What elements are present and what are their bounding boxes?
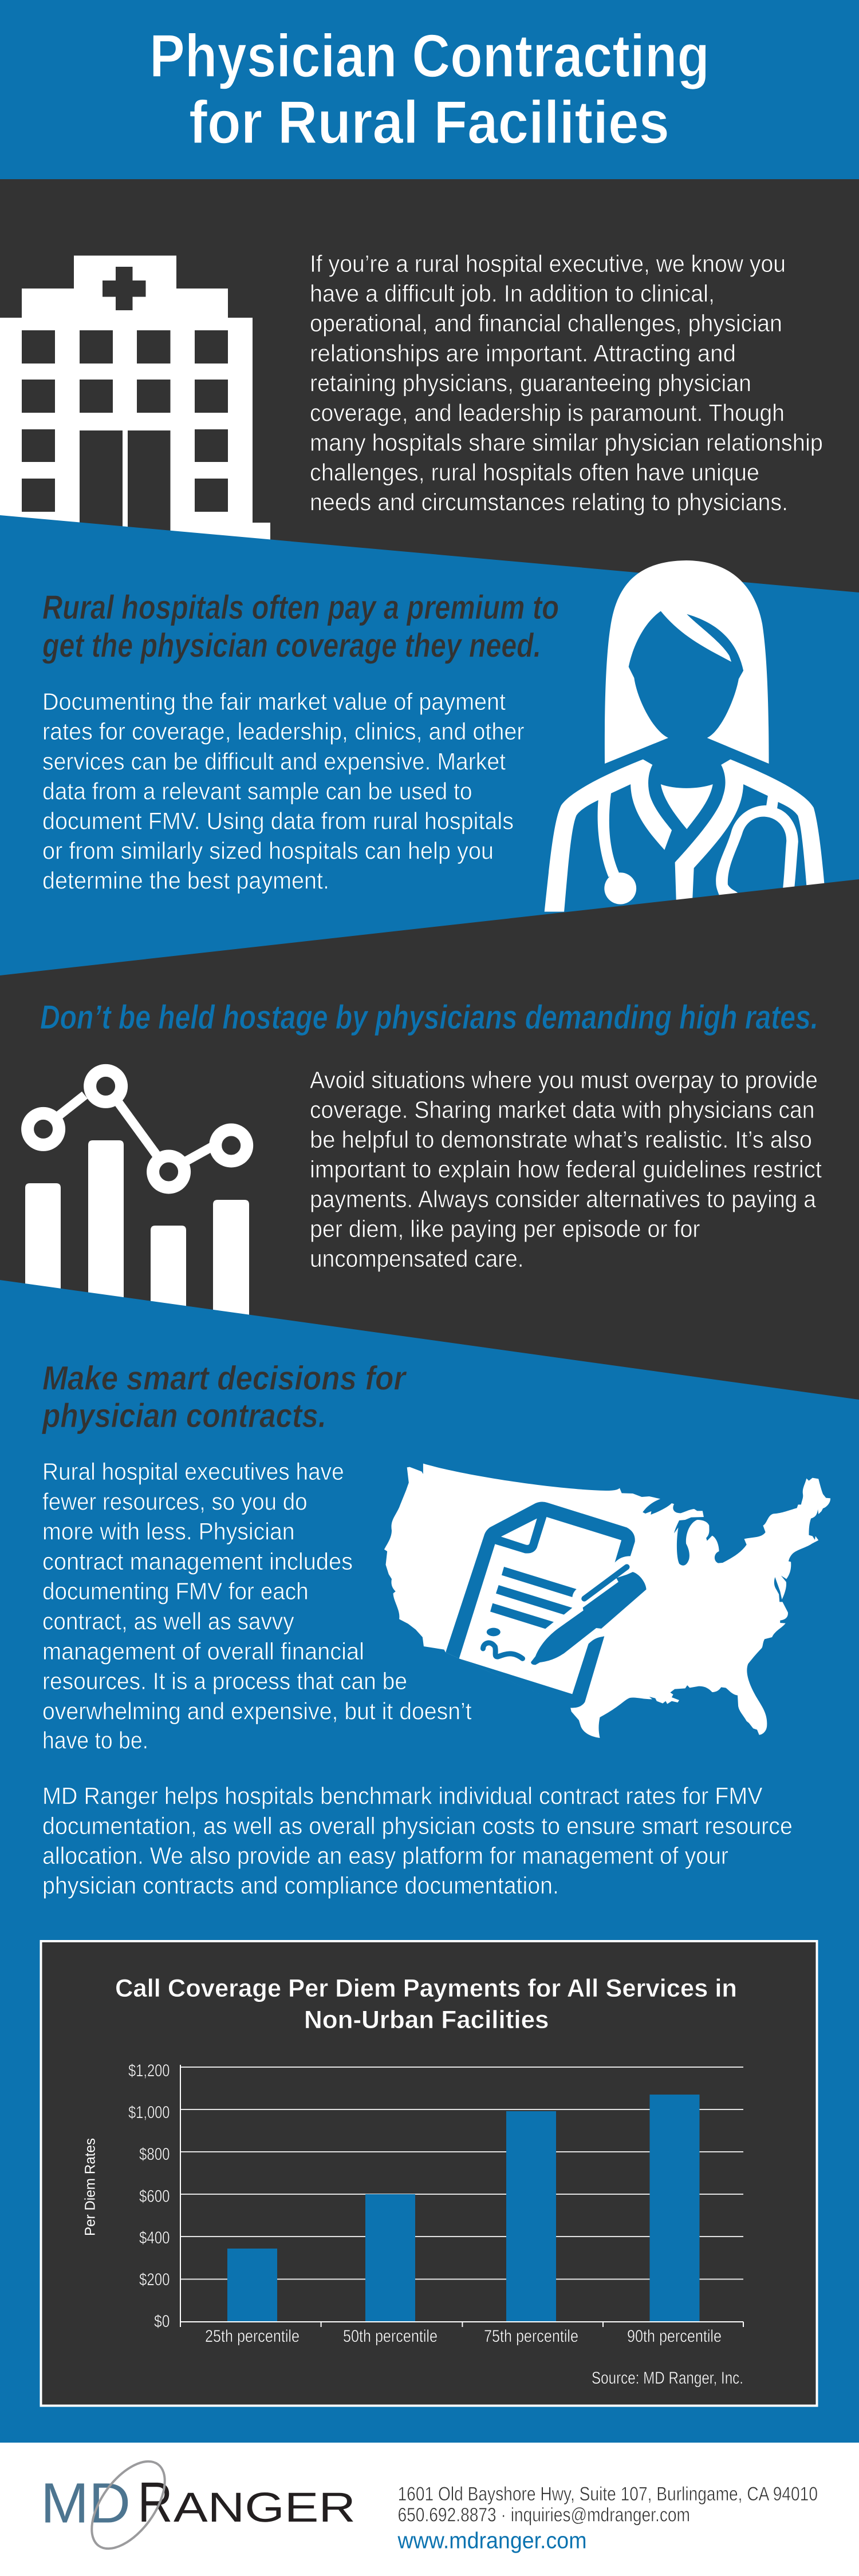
text block: introduction: retaining physicians, guaranteeing physician — [310, 370, 751, 396]
y-axis title: Per Diem Rates — [82, 2138, 98, 2236]
panel: don't be held hostage — [0, 879, 859, 1431]
y-axis labels: $200 — [139, 2270, 170, 2289]
y-axis labels: $600 — [139, 2187, 170, 2206]
text block: hostage: coverage. Sharing market data with physicians can — [310, 1096, 814, 1123]
heading: smart decisions: physician contracts. — [41, 1397, 326, 1435]
text block: smart decisions: more with less. Physician — [42, 1518, 295, 1545]
text block: introduction: have a difficult job. In addition to clinical, — [310, 280, 715, 307]
text block: premium: or from similarly sized hospitals can help you — [42, 837, 494, 864]
y-axis labels: $800 — [139, 2145, 170, 2164]
text block: introduction: If you’re a rural hospital executive, we know you — [310, 250, 786, 277]
logo: MD Ranger: MD — [41, 2471, 131, 2535]
logo: MD Ranger — [41, 2449, 356, 2561]
text block: introduction: many hospitals share similar physician relationship — [310, 429, 823, 456]
x-axis labels: 25th percentile — [205, 2327, 300, 2346]
text block: introduction: coverage, and leadership is paramount. Though — [310, 400, 785, 426]
panel: introduction — [0, 179, 859, 923]
text block: smart decisions: Rural hospital executives have — [42, 1458, 344, 1485]
heading: premium: Rural hospitals often pay a premium to — [42, 588, 559, 626]
panel: rural hospitals pay a premium — [0, 515, 859, 1030]
text block: smart decisions: overwhelming and expensive, but it doesn’t — [42, 1697, 472, 1724]
text block: introduction: operational, and financial challenges, physician — [310, 310, 782, 337]
title: for Rural Facilities — [189, 89, 669, 156]
text block: introduction — [310, 250, 823, 515]
heading: premium: get the physician coverage they need. — [42, 626, 541, 664]
text block: smart decisions: resources. It is a process that can be — [42, 1668, 407, 1694]
panel: title header — [0, 0, 859, 179]
text block: smart decisions: fewer resources, so you do — [42, 1488, 308, 1515]
x-axis labels: 90th percentile — [627, 2327, 722, 2346]
text block: about MD Ranger: MD Ranger helps hospitals benchmark individual contract rates for FMV — [42, 1783, 763, 1809]
text block: hostage: per diem, like paying per episode or for — [310, 1215, 700, 1242]
text block: about MD Ranger — [42, 1783, 793, 1899]
source note: Source: MD Ranger, Inc. — [592, 2369, 743, 2388]
text block: introduction: needs and circumstances relating to physicians. — [310, 489, 788, 515]
heading: premium — [42, 588, 559, 664]
text block: hostage: payments. Always consider alternatives to paying a — [310, 1186, 817, 1212]
panel: footer — [0, 2443, 859, 2576]
text block: hostage: be helpful to demonstrate what’s realistic. It’s also — [310, 1126, 812, 1153]
chart title: Call Coverage Per Diem Payments for All Services in — [115, 1974, 737, 2002]
contact details: 650.692.8873 · inquiries@mdranger.com — [397, 2504, 690, 2526]
logo: MD Ranger: R — [137, 2470, 173, 2534]
text block: smart decisions: contract management includes — [42, 1548, 353, 1575]
contract document — [446, 1502, 648, 1708]
text block: about MD Ranger: allocation. We also provide an easy platform for management of your — [42, 1842, 728, 1869]
x-axis labels: 75th percentile — [484, 2327, 578, 2346]
text block: introduction: challenges, rural hospitals often have unique — [310, 459, 759, 485]
heading: smart decisions: Make smart decisions for — [42, 1359, 407, 1397]
icon: female doctor with stethoscope — [545, 560, 826, 912]
text block: about MD Ranger: documentation, as well as overall physician costs to ensure smart resource — [42, 1812, 793, 1839]
title — [149, 22, 710, 156]
contact details — [397, 2483, 818, 2554]
title: Physician Contracting — [149, 22, 710, 90]
y-axis labels: $400 — [139, 2229, 170, 2247]
chart title: Non-Urban Facilities — [304, 2006, 549, 2034]
contact details: www.mdranger.com — [397, 2528, 586, 2554]
text block: about MD Ranger: physician contracts and compliance documentation. — [42, 1872, 559, 1899]
y-axis labels: $1,200 — [128, 2061, 170, 2080]
text block: premium: services can be difficult and expensive. Market — [42, 748, 506, 775]
x-axis labels: 50th percentile — [343, 2327, 438, 2346]
y-axis labels: $0 — [154, 2312, 170, 2331]
logo: MD Ranger: ANGER — [174, 2484, 356, 2531]
text block: introduction: relationships are important. Attracting and — [310, 340, 736, 366]
chart title — [115, 1974, 737, 2034]
text block: premium: rates for coverage, leadership, clinics, and other — [42, 718, 525, 745]
y-axis labels — [128, 2061, 170, 2331]
text block: hostage: important to explain how federal guidelines restrict — [310, 1156, 822, 1183]
text block: premium: document FMV. Using data from rural hospitals — [42, 807, 514, 835]
text block: hostage: Avoid situations where you must overpay to provide — [310, 1066, 818, 1093]
pen — [531, 1567, 647, 1665]
text block: smart decisions: management of overall financial — [42, 1638, 364, 1665]
text block: premium — [42, 688, 525, 894]
x-axis labels — [205, 2327, 722, 2346]
text block: premium: Documenting the fair market value of payment — [42, 688, 506, 715]
text block: smart decisions — [42, 1458, 472, 1754]
icon: bar and line chart — [25, 1070, 249, 1431]
text block: hostage — [310, 1066, 822, 1272]
panel: bar chart — [41, 1941, 817, 2405]
bars — [227, 2095, 700, 2321]
icon: hospital building — [0, 255, 270, 574]
text block: smart decisions: contract, as well as savvy — [42, 1608, 294, 1635]
map of the United States — [384, 1464, 830, 1738]
text block: premium: data from a relevant sample can be used to — [42, 777, 472, 804]
text block: premium: determine the best payment. — [42, 867, 329, 894]
text block: smart decisions: have to be. — [42, 1726, 148, 1754]
text block: smart decisions: documenting FMV for each — [42, 1578, 309, 1605]
heading: smart decisions — [41, 1359, 407, 1435]
icon: US map with contract and pen — [384, 1464, 830, 1738]
text block: hostage: uncompensated care. — [310, 1245, 523, 1272]
y-axis labels: $1,000 — [128, 2103, 170, 2122]
panel: make smart decisions — [0, 1280, 859, 2443]
